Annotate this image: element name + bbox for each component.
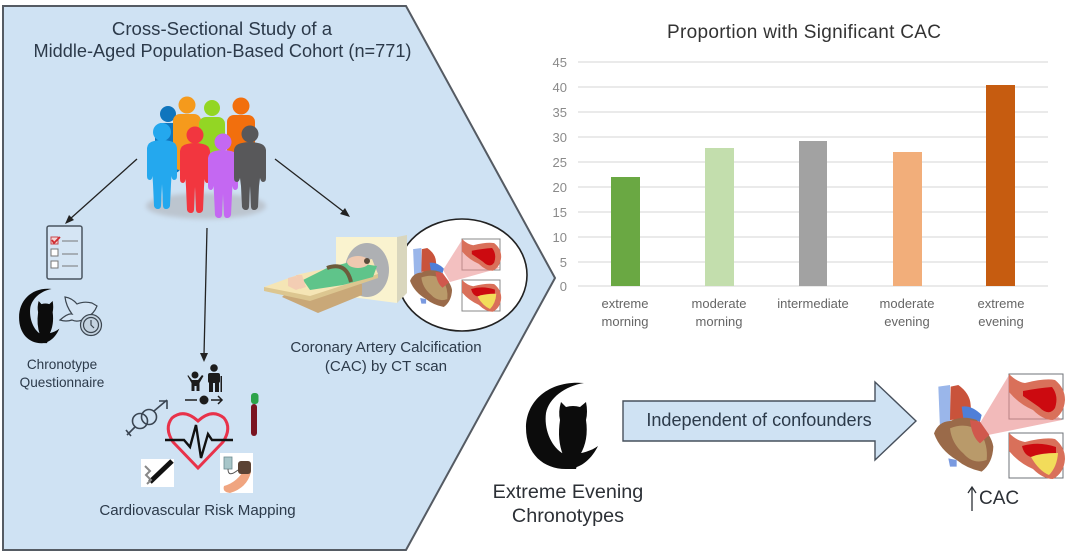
icon: questionnaire clipboard [47,226,82,279]
bar chart: proportion with significant CAC: moderate [692,296,746,311]
icon: large owl on moon [526,383,598,469]
bar chart: proportion with significant CAC: 30 [553,130,567,145]
text: CAC by CT scan: Coronary Artery Calcification [290,339,482,356]
text: increased CAC [968,487,1019,511]
bar chart: proportion with significant CAC: 20 [553,180,567,195]
text: cardiovascular risk mapping: Cardiovascular Risk Mapping [99,502,296,519]
bar chart: proportion with significant CAC: 25 [553,155,567,170]
bar chart: proportion with significant CAC: moderate [880,296,934,311]
bar chart: proportion with significant CAC: 40 [553,80,567,95]
icon: bird and clock [60,297,102,336]
arrow: independent of confounders [623,382,916,460]
icon: blood tube [251,393,258,436]
bar chart: proportion with significant CAC: 10 [553,230,567,245]
title [34,18,411,61]
bar chart: proportion with significant CAC: 0 [560,279,567,294]
bar chart: proportion with significant CAC: morning [602,314,648,329]
text: extreme evening chronotypes: Chronotypes [512,505,624,527]
text: increased CAC: CAC [979,488,1019,509]
text: chronotype questionnaire: Questionnaire [20,375,104,390]
icon: age child and elder [185,364,222,404]
bar chart: proportion with significant CAC: evening [978,314,1024,329]
bar chart: proportion with significant CAC: morning [696,314,742,329]
arrow: people to risk mapping [200,228,208,362]
title: Cross-Sectional Study of a [112,18,333,39]
bar chart: proportion with significant CAC: intermediate [777,296,849,311]
icon: small owl on moon [19,289,59,343]
icon: group of people [146,96,266,219]
bar chart: proportion with significant CAC: 15 [553,205,567,220]
text: chronotype questionnaire [20,357,104,390]
bar chart: proportion with significant CAC: 5 [560,255,567,270]
icon: heart with arteries inset [410,239,501,312]
bar chart: proportion with significant CAC: 35 [553,105,567,120]
arrow: people to CT scan [275,159,350,217]
arrow: independent of confounders: Independent of confounders [646,410,872,430]
circle: CT heart inset [397,219,527,331]
icon: sex symbols [126,400,167,436]
chart title: Proportion with Significant CAC [667,22,941,43]
bar chart: proportion with significant CAC: 45 [553,55,567,70]
text: CAC by CT scan: (CAC) by CT scan [325,358,447,375]
icon: large heart with arteries [934,374,1065,479]
icon: CT scanner with patient [264,235,407,313]
icon: cigarette [141,459,174,487]
icon: blood pressure [220,453,253,493]
arrow: people to questionnaire [65,159,137,224]
text: extreme evening chronotypes [493,481,643,527]
text: CAC by CT scan [290,339,482,375]
title: Middle-Aged Population-Based Cohort (n=771) [34,41,411,61]
bar chart: proportion with significant CAC: extreme [602,296,648,311]
bar chart: proportion with significant CAC: evening [884,314,930,329]
text: chronotype questionnaire: Chronotype [27,357,97,372]
panel: study design hexagon [3,6,555,550]
icon: heart with ecg [165,414,233,468]
text: extreme evening chronotypes: Extreme Evening [493,481,643,503]
bar chart: proportion with significant CAC: extreme [978,296,1024,311]
bar chart: proportion with significant CAC [553,22,1048,329]
